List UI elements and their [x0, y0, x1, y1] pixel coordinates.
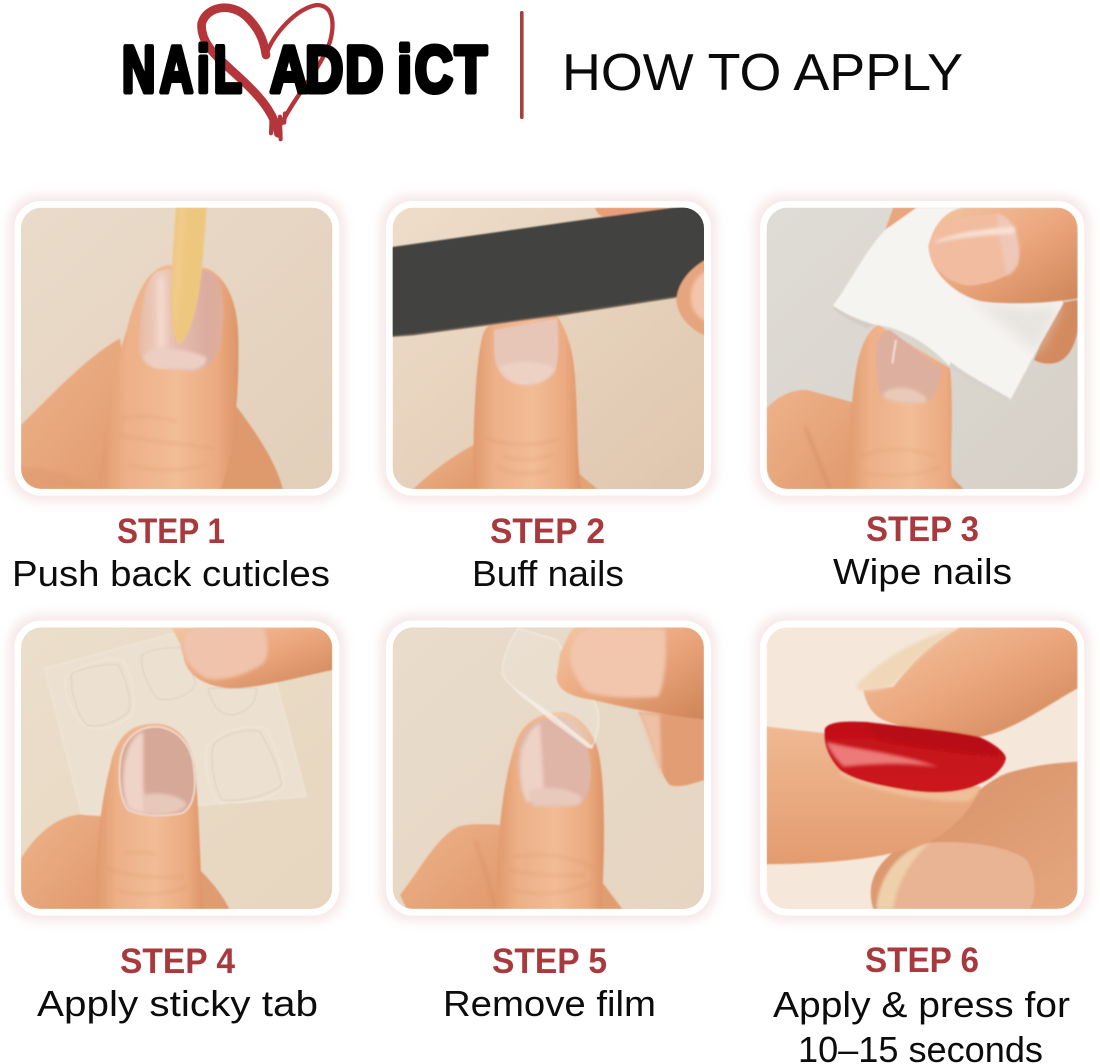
panel: step 2 photo	[380, 195, 717, 502]
left back finger	[21, 814, 103, 909]
lower thumb nail	[877, 842, 1035, 909]
logo wordmark	[122, 32, 487, 107]
nail highlight	[826, 742, 938, 767]
step 2 label	[472, 512, 624, 594]
red nail	[824, 722, 1006, 792]
back hand	[413, 443, 477, 489]
step 1 label	[12, 512, 330, 594]
step 4 text: Apply sticky tab	[37, 983, 318, 1024]
top finger	[557, 627, 704, 719]
thumb	[99, 265, 238, 489]
panel: step 3 photo	[754, 195, 1090, 502]
nail	[494, 318, 558, 385]
step 3 heading: STEP 3	[866, 510, 979, 549]
main finger	[497, 712, 604, 909]
step 2 heading: STEP 2	[490, 512, 605, 551]
nail file	[390, 203, 708, 336]
logo wordmark: NAiL	[122, 33, 242, 107]
upper thumb	[928, 208, 1078, 303]
step 2 text: Buff nails	[472, 553, 624, 594]
left back finger	[21, 338, 122, 489]
step 5 text: Remove film	[443, 983, 656, 1024]
step 5 heading: STEP 5	[492, 942, 607, 981]
step 3 text: Wipe nails	[833, 551, 1012, 592]
nail	[518, 717, 591, 805]
nail	[876, 330, 941, 403]
lower right finger	[871, 762, 1078, 909]
film	[502, 628, 599, 748]
step 1 heading: STEP 1	[117, 512, 225, 551]
sheet tab outlines	[71, 648, 282, 800]
header	[122, 5, 963, 139]
nail	[139, 269, 223, 371]
right back finger	[200, 870, 229, 909]
left back finger	[400, 824, 500, 909]
wrinkles	[487, 438, 560, 473]
step 3 label	[833, 510, 1012, 592]
icon: red brush heart	[202, 5, 332, 139]
title: HOW TO APPLY	[562, 44, 963, 102]
step 6 label	[773, 941, 1070, 1064]
panel: step 4 photo	[8, 615, 345, 921]
panel: step 6 photo	[754, 615, 1090, 921]
top finger	[863, 627, 1078, 737]
panel: step 1 photo	[8, 195, 345, 502]
wrinkles	[107, 852, 187, 894]
cotton pad	[833, 208, 1063, 401]
wrinkles	[120, 417, 213, 470]
step 6 heading: STEP 6	[865, 941, 979, 980]
thumb	[96, 723, 203, 909]
wrinkles	[860, 449, 940, 475]
logo wordmark: ADDiCT	[270, 32, 487, 106]
step 4 label	[37, 942, 318, 1024]
wrinkles	[510, 855, 593, 893]
right thumb	[676, 259, 704, 336]
sticky tab sheet	[45, 633, 307, 815]
finger	[473, 315, 582, 489]
main finger	[847, 325, 963, 489]
step 5 label	[443, 942, 656, 1024]
panel: step 5 photo	[380, 615, 717, 921]
nail with tab	[119, 727, 195, 816]
back fingers	[885, 208, 917, 231]
step 1 text: Push back cuticles	[12, 553, 330, 594]
left finger	[767, 727, 981, 864]
top finger	[172, 627, 332, 688]
step 4 heading: STEP 4	[120, 942, 235, 981]
lower right finger	[638, 712, 704, 786]
step 6 text: Apply & press for	[773, 984, 1070, 1025]
orange stick	[171, 208, 207, 344]
logo: Nail Addict	[122, 5, 487, 139]
right back finger	[217, 407, 283, 489]
divider	[520, 11, 524, 119]
upper finger	[595, 208, 667, 218]
